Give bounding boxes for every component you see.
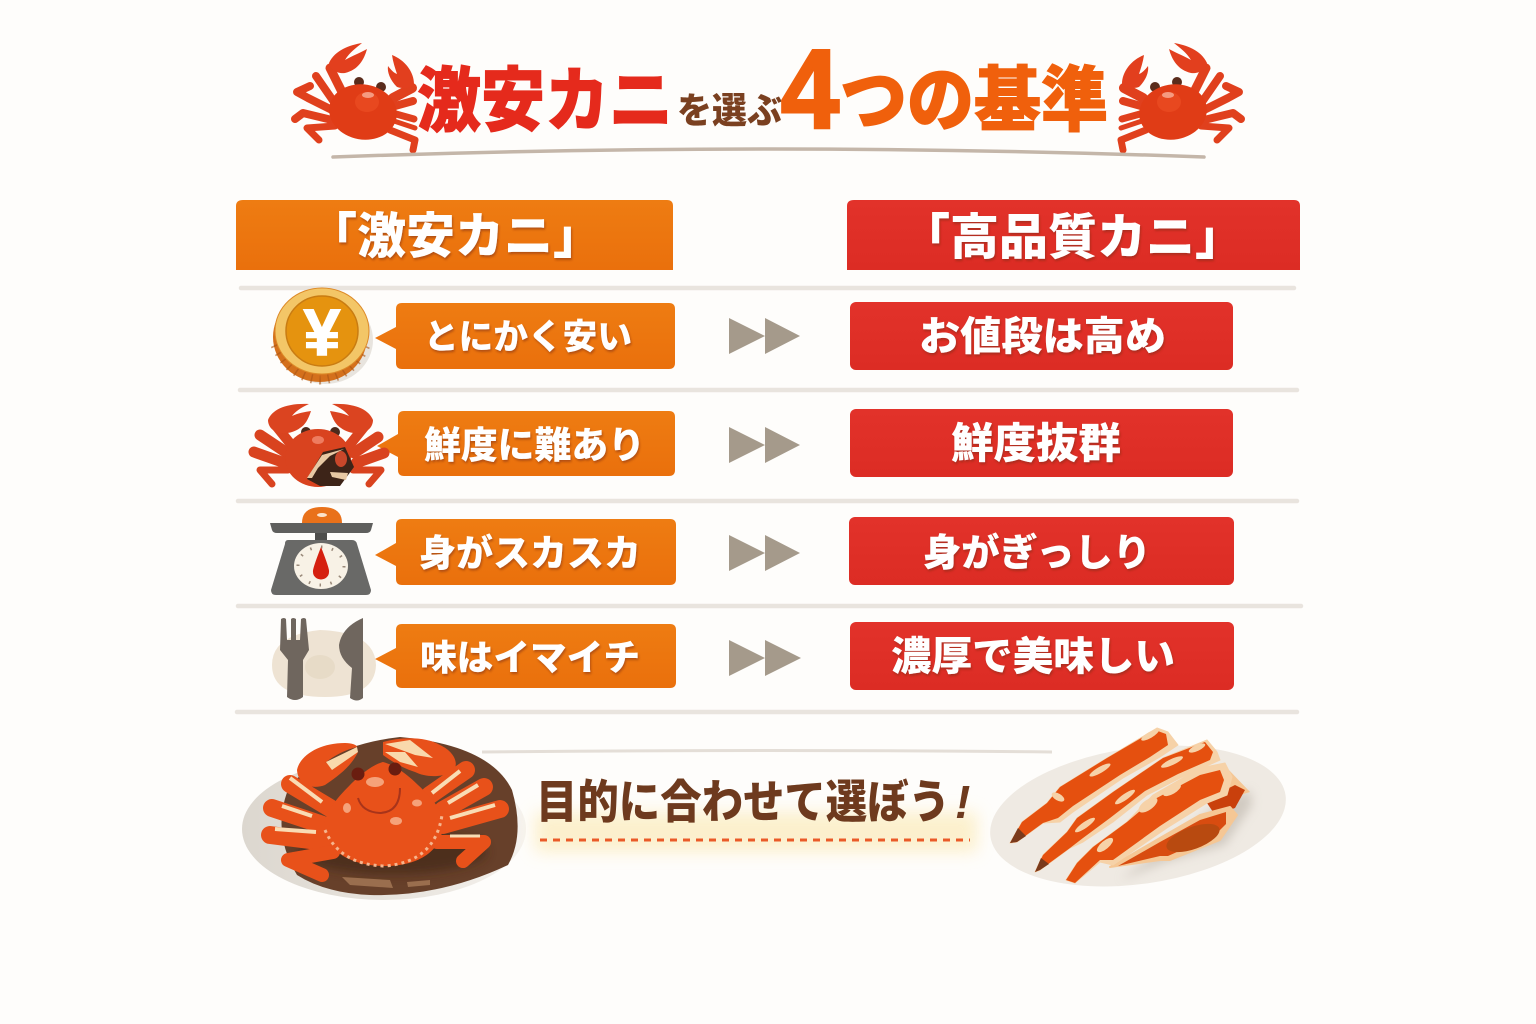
column header: 激安カニ: 「激安カニ」	[308, 210, 602, 264]
label: お値段は高め	[850, 302, 1233, 370]
illustration: whole crab on plate	[242, 737, 526, 900]
arrows	[729, 535, 800, 571]
callout exclamation mark: !	[955, 776, 970, 828]
arrows	[729, 318, 800, 354]
label: 身がスカスカ	[375, 519, 676, 585]
title underline	[333, 149, 1204, 157]
label: 味はイマイチ	[375, 624, 676, 688]
label: 鮮度に難あり: 鮮度に難あり	[424, 425, 645, 466]
label: 濃厚で美味しい: 濃厚で美味しい	[891, 635, 1175, 679]
row 2	[254, 404, 1233, 487]
label: 鮮度抜群	[850, 409, 1233, 477]
title text: つの基準: つの基準	[840, 62, 1108, 141]
label: とにかく安い	[375, 303, 675, 369]
highlight band	[535, 812, 977, 852]
icon: scale	[270, 507, 373, 595]
icon: crab left	[295, 43, 415, 150]
label: お値段は高め: お値段は高め	[919, 315, 1166, 359]
icon: damaged crab	[254, 404, 384, 487]
illustration: crab legs on plate	[981, 727, 1295, 904]
icon: plate with fork and knife	[272, 618, 376, 700]
leg 3	[1066, 763, 1232, 883]
label: 身がぎっしり: 身がぎっしり	[923, 532, 1151, 575]
icon: yen coin: ¥	[304, 295, 341, 369]
leg 2	[1035, 740, 1220, 872]
arrows	[729, 427, 800, 463]
label: 身がぎっしり	[849, 517, 1234, 585]
leg 1	[1010, 727, 1178, 843]
label: 濃厚で美味しい	[850, 622, 1234, 690]
label: 身がスカスカ: 身がスカスカ	[419, 532, 641, 574]
label: とにかく安い: とにかく安い	[424, 318, 632, 357]
title text: 4: 4	[781, 27, 839, 152]
dotted underline	[540, 838, 970, 842]
row 1	[273, 288, 1233, 384]
callout: 目的に合わせて選ぼう: 目的に合わせて選ぼう	[536, 776, 950, 828]
closing line decoration	[482, 750, 1052, 752]
label: 鮮度抜群: 鮮度抜群	[951, 420, 1121, 467]
row 3	[270, 507, 1234, 595]
title	[295, 27, 1241, 157]
row 4	[272, 618, 1234, 700]
claw	[1110, 807, 1237, 867]
title text: を選ぶ: を選ぶ	[677, 90, 782, 131]
column header: 激安カニ	[236, 200, 673, 270]
column header: 高品質カニ: 「高品質カニ」	[901, 211, 1244, 265]
arrows	[729, 640, 801, 676]
label: 鮮度に難あり	[377, 411, 675, 476]
column header: 高品質カニ	[847, 200, 1300, 270]
icon: yen coin	[273, 288, 373, 384]
title text: 激安カニ: 激安カニ	[417, 62, 673, 140]
label: 味はイマイチ: 味はイマイチ	[420, 637, 640, 678]
icon: crab right	[1121, 43, 1241, 150]
